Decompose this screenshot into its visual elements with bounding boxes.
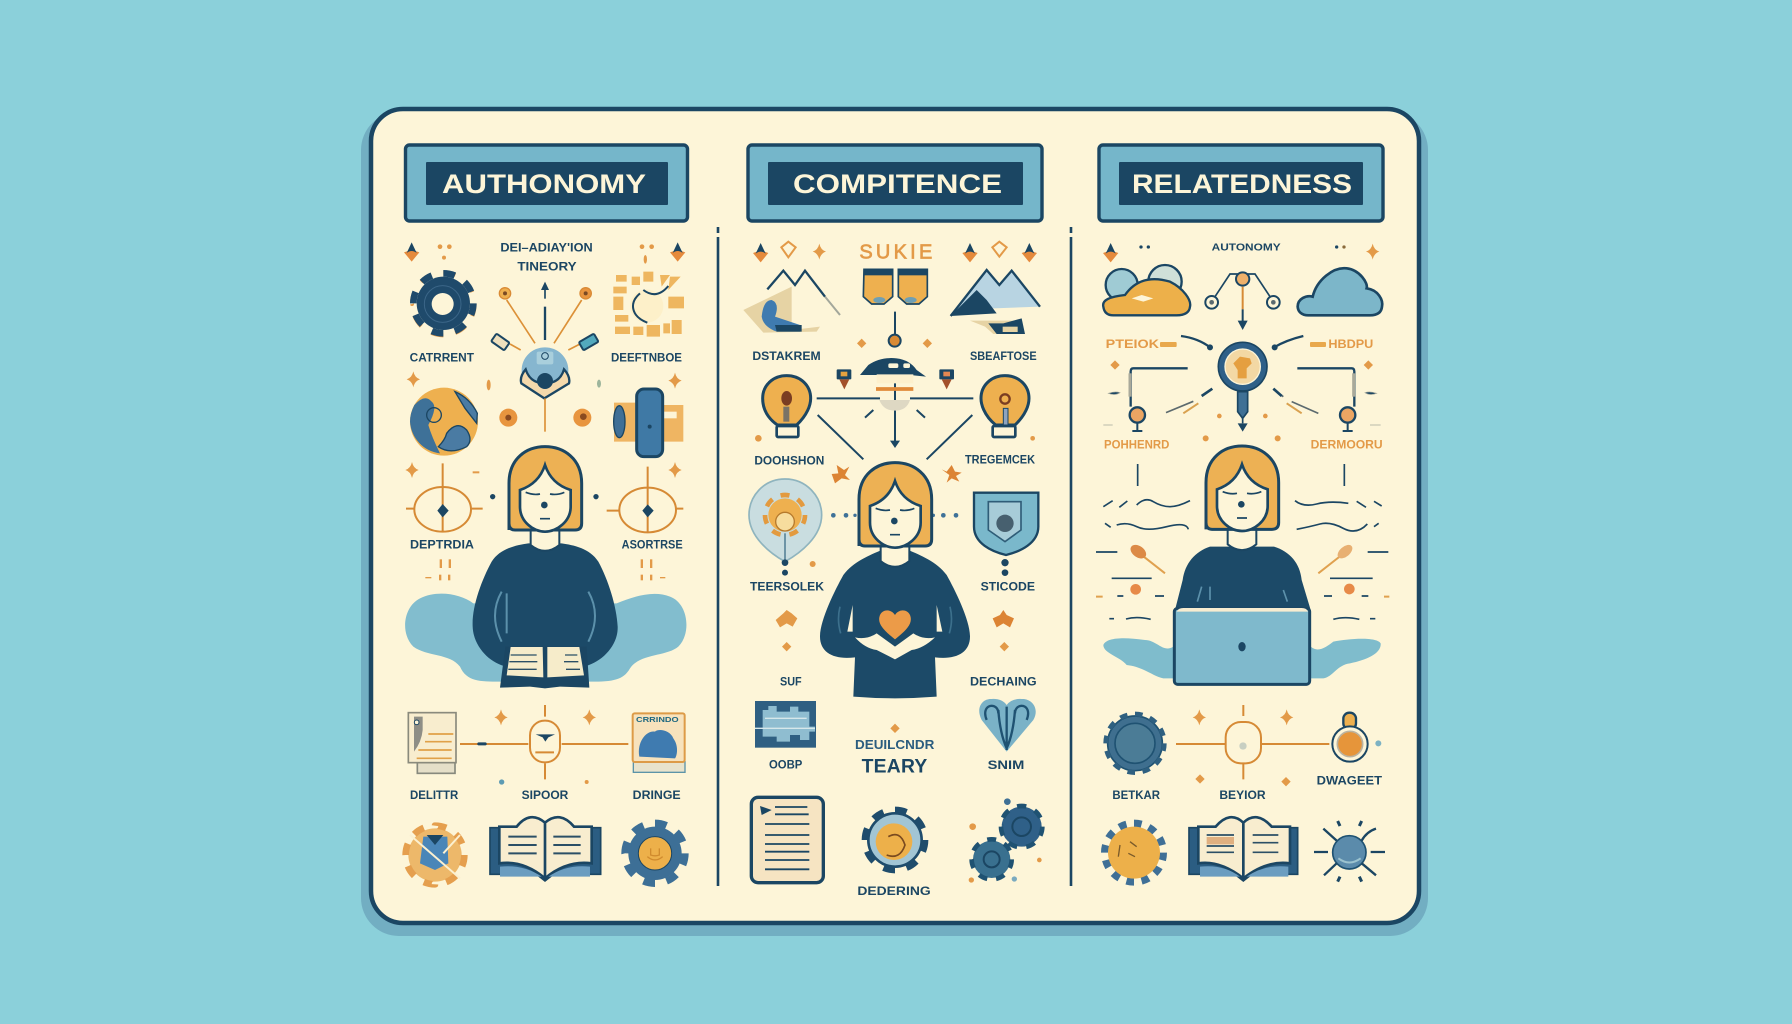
label: ptieiok: PTEIOK bbox=[1106, 337, 1159, 351]
icon: blue cloud bbox=[1298, 268, 1382, 315]
icon: document bbox=[408, 713, 456, 773]
label: snim: SNIM bbox=[988, 758, 1024, 772]
icon: globe bbox=[410, 388, 478, 456]
label: oobp: OOBP bbox=[769, 757, 802, 771]
column: competence bbox=[743, 145, 1042, 898]
decorative marks top bbox=[404, 242, 685, 264]
icon: amber cloud bbox=[1103, 265, 1190, 315]
label: hbdp: HBDPU bbox=[1328, 337, 1373, 351]
label: beyior: BEYIOR bbox=[1219, 788, 1266, 802]
label: delitter: DELITTR bbox=[410, 788, 459, 802]
left bracket bbox=[1103, 360, 1188, 431]
label: doohshon: DOOHSHON bbox=[754, 453, 824, 467]
orange ornaments bbox=[755, 435, 1035, 518]
icon: blue gear bbox=[625, 823, 685, 883]
icon: blue cog bbox=[1106, 714, 1164, 773]
icon: right mountain bbox=[951, 270, 1040, 334]
connector with pod bbox=[1176, 705, 1329, 786]
main card panel bbox=[371, 109, 1419, 923]
label: dstakrem: DSTAKREM bbox=[752, 349, 821, 363]
decorative marks top bbox=[1103, 243, 1379, 262]
icon: left mountain bbox=[743, 271, 840, 333]
cloud behind person bbox=[405, 594, 686, 682]
label: catrrent: CATRRENT bbox=[410, 351, 475, 365]
panel shadow bbox=[361, 112, 1428, 936]
subtitle: TINEORY bbox=[517, 260, 577, 274]
icon: right bulb bbox=[981, 376, 1029, 437]
icon: amber gear bbox=[406, 826, 464, 884]
icon: left target bbox=[406, 463, 483, 532]
centre title bbox=[855, 724, 934, 777]
diagram: radiating arrows and head bbox=[487, 282, 601, 432]
decorative stars bbox=[405, 371, 682, 499]
icon: shield bbox=[974, 493, 1038, 555]
person reading book bbox=[473, 447, 618, 688]
icon: ornate amber seal bbox=[613, 272, 684, 337]
heading: autonomy bbox=[406, 145, 688, 221]
icon: left bulb bbox=[763, 376, 811, 437]
relatedness contents bbox=[1096, 243, 1389, 882]
wavy lines right bbox=[1295, 464, 1388, 619]
label: betkar: BETKAR bbox=[1112, 788, 1160, 802]
divider right bbox=[1070, 227, 1072, 886]
label: ptieiok bbox=[1106, 337, 1177, 351]
label: deptrdia: DEPTRDIA bbox=[410, 538, 474, 552]
label: tregemcek: TREGEMCEK bbox=[965, 453, 1035, 467]
heading: relatedness bbox=[1099, 145, 1383, 221]
right bracket bbox=[1297, 360, 1381, 431]
icon: card bbox=[633, 713, 685, 772]
spoons and orange accents bbox=[1096, 542, 1389, 597]
label: dwageet: DWAGEET bbox=[1317, 773, 1383, 787]
label: hbdp bbox=[1310, 337, 1373, 351]
connector with pod bbox=[460, 705, 628, 785]
label: sipoor: SIPOOR bbox=[522, 788, 569, 802]
icon: blue orb with rays bbox=[1314, 821, 1385, 882]
subtitle bbox=[500, 241, 593, 274]
divider left bbox=[717, 227, 719, 886]
orange subtitle: SUKIE bbox=[859, 241, 932, 263]
label: pohhenrd: POHHENRD bbox=[1104, 437, 1170, 451]
label: asortrse: ASORTRSE bbox=[622, 538, 683, 552]
icon: heart shield bbox=[979, 699, 1036, 752]
centre title: TEARY bbox=[862, 756, 927, 777]
icon: amber sun blob bbox=[1105, 823, 1163, 882]
cloud wings behind laptop bbox=[1103, 638, 1381, 678]
icon: card: CRRINDO bbox=[636, 715, 679, 724]
autonomy contents bbox=[404, 241, 686, 884]
label: dedering: DEDERING bbox=[857, 884, 931, 898]
icon: balloon with bulb bbox=[749, 479, 822, 563]
diagram: central arrows bbox=[817, 312, 973, 459]
label: dechaing: DECHAING bbox=[970, 675, 1037, 689]
icon: open book bbox=[1189, 817, 1298, 881]
label: dringe: DRINGE bbox=[633, 788, 681, 802]
icon: gear bbox=[412, 273, 475, 335]
icon: orange pendant bbox=[1332, 713, 1381, 762]
wavy lines left bbox=[1096, 464, 1190, 619]
heading: relatedness: RELATEDNESS bbox=[1132, 169, 1352, 199]
label: teersolek: TEERSOLEK bbox=[750, 580, 824, 594]
column: relatedness bbox=[1096, 145, 1389, 882]
label: sbeaftose: SBEAFTOSE bbox=[970, 349, 1037, 363]
subtitle: DEI–ADIAY'ION bbox=[500, 241, 593, 255]
competence contents bbox=[743, 241, 1042, 898]
diagonal marks bbox=[1166, 389, 1318, 441]
icon: blue device bbox=[614, 389, 683, 457]
diagram: network and magnifier bbox=[1181, 272, 1303, 432]
decorative dashes bbox=[425, 559, 665, 580]
label: suf: SUF bbox=[780, 675, 802, 689]
person with heart bbox=[820, 463, 970, 698]
heading: competence: COMPITENCE bbox=[793, 169, 1002, 199]
icon: blue stamp bbox=[755, 701, 816, 748]
icon: document bbox=[751, 797, 823, 883]
decorative marks top bbox=[753, 242, 1037, 262]
icon: gear with amber centre bbox=[865, 810, 925, 870]
label: deeftnboe: DEEFTNBOE bbox=[611, 351, 682, 365]
centre title: DEUILCNDR bbox=[855, 738, 934, 752]
subtitle: AUTONOMY bbox=[1212, 243, 1281, 254]
label: sticode: STICODE bbox=[981, 580, 1035, 594]
icon: open book bbox=[490, 817, 601, 881]
label: dermooru: DERMOORU bbox=[1311, 437, 1383, 451]
heading: autonomy: AUTHONOMY bbox=[442, 169, 646, 199]
column: autonomy bbox=[404, 145, 688, 884]
icon: goggles bbox=[863, 269, 927, 304]
person with laptop bbox=[1174, 446, 1311, 684]
left and right small markers bbox=[776, 559, 1014, 651]
icon: right target bbox=[607, 467, 683, 532]
heading: competence bbox=[748, 145, 1042, 221]
icon: twin gears bbox=[969, 798, 1042, 883]
